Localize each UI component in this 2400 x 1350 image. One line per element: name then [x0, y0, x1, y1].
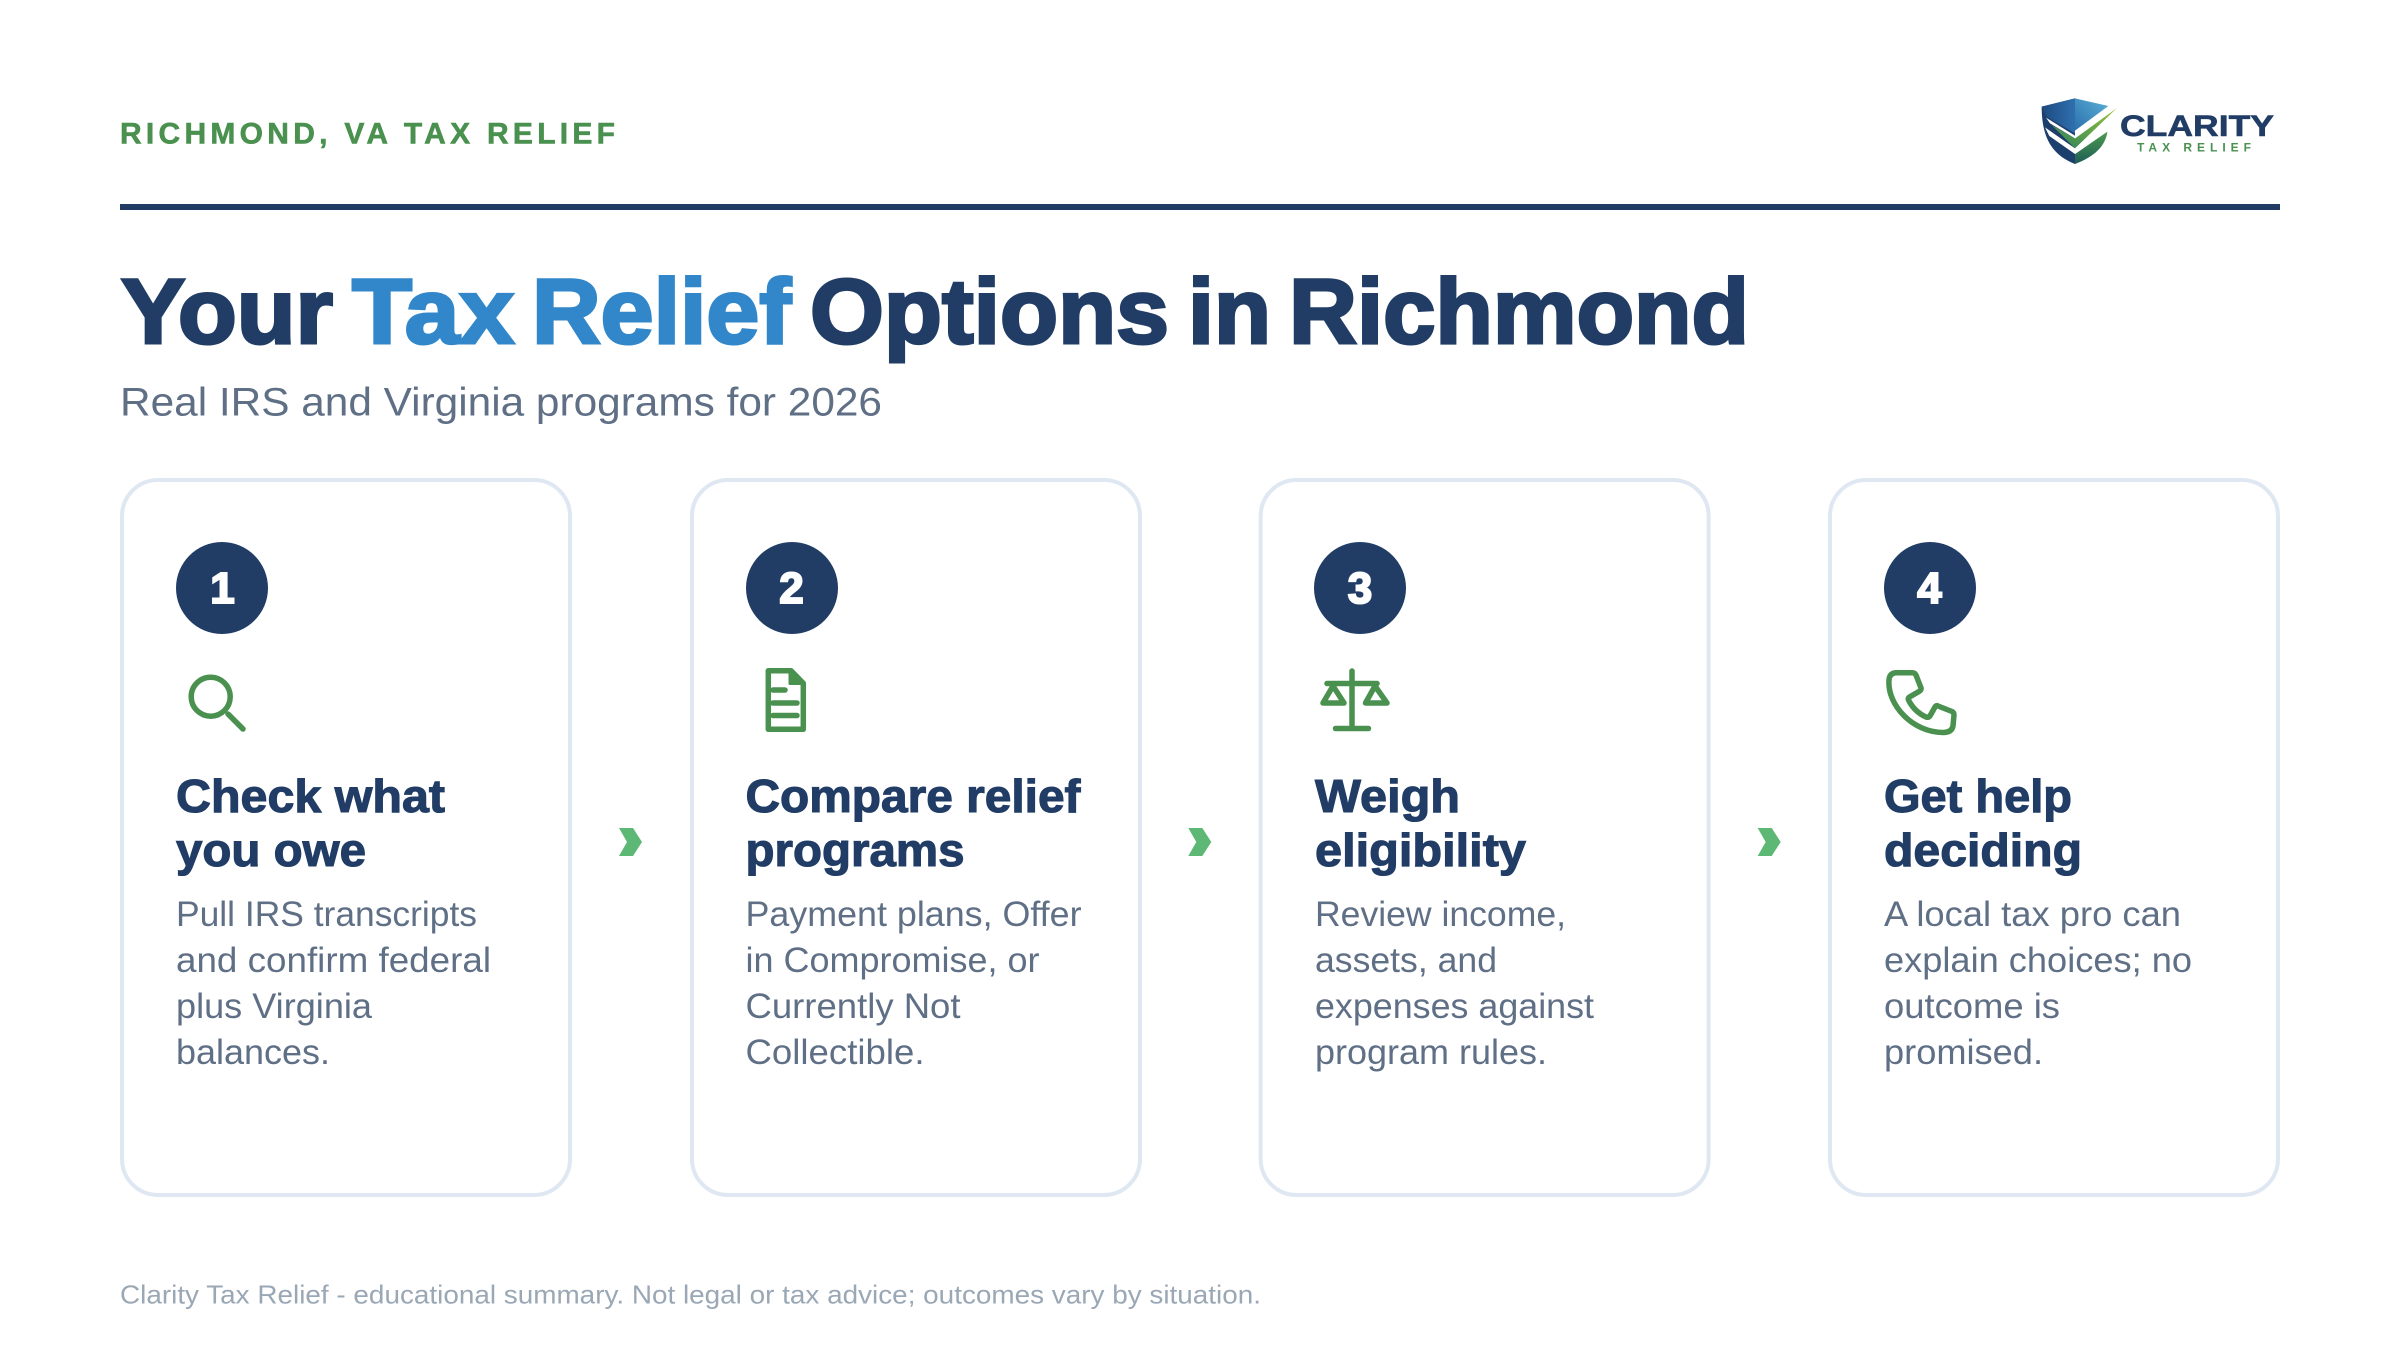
logo: Clarity Tax Relief	[2042, 98, 2274, 164]
panel: step 2	[692, 480, 1140, 1195]
step 1 heading: Check what	[176, 770, 445, 822]
step 2 heading	[746, 770, 1081, 876]
step 3 heading	[1315, 770, 1526, 876]
icon: shield with check	[2042, 98, 2117, 164]
step 3 heading: Weigh	[1315, 770, 1460, 822]
step number 3: 3	[1348, 564, 1372, 613]
step 1 heading	[176, 770, 445, 876]
step number 2	[746, 542, 838, 634]
step 3 heading: eligibility	[1315, 824, 1526, 876]
step 1 description: and confirm federal	[176, 941, 491, 980]
panel: step 4	[1830, 480, 2278, 1195]
step 3 description: assets, and	[1315, 941, 1497, 980]
step 1 heading: you owe	[176, 824, 366, 876]
title	[121, 261, 1749, 363]
step 2 description: Currently Not	[746, 987, 961, 1026]
step 1 description: plus Virginia	[176, 987, 373, 1026]
title: Tax	[352, 261, 514, 363]
step 2 description	[746, 895, 1082, 1072]
step 2 heading: Compare relief	[746, 770, 1081, 822]
step 2 description: Collectible.	[746, 1033, 924, 1072]
step number 4: 4	[1917, 564, 1942, 613]
title: Relief	[532, 261, 791, 363]
icon: balance scale	[1323, 671, 1387, 728]
step 4 description: promised.	[1884, 1033, 2043, 1072]
step 3 description: Review income,	[1315, 895, 1566, 934]
eyebrow heading: RICHMOND, VA TAX RELIEF	[120, 118, 615, 150]
step 4 description	[1884, 895, 2192, 1072]
step 4 heading: deciding	[1884, 824, 2082, 876]
step number 1: 1	[210, 564, 235, 613]
title: Options	[810, 261, 1169, 363]
step 1 description: balances.	[176, 1033, 330, 1072]
arrow 3 to 4	[1758, 828, 1781, 856]
step 3 description	[1315, 895, 1594, 1072]
step number 3	[1314, 542, 1406, 634]
step number 4	[1884, 542, 1976, 634]
panel: step 3	[1261, 480, 1709, 1195]
step 1 description	[176, 895, 491, 1072]
icon: document	[768, 671, 803, 729]
step 4 description: A local tax pro can	[1884, 895, 2181, 934]
arrow 2 to 3	[1188, 828, 1211, 856]
subtitle: Real IRS and Virginia programs for 2026	[120, 380, 882, 424]
step 3 description: expenses against	[1315, 987, 1594, 1026]
step 4 heading: Get help	[1884, 770, 2072, 822]
title: Your	[121, 261, 333, 363]
step 4 description: explain choices; no	[1884, 941, 2192, 980]
step 4 heading	[1884, 770, 2082, 876]
logo tagline: TAX RELIEF	[2137, 140, 2251, 154]
step 2 description: in Compromise, or	[746, 941, 1040, 980]
panel: step 1	[122, 480, 570, 1195]
title: in	[1188, 261, 1271, 363]
arrow 1 to 2	[619, 828, 642, 856]
step 2 description: Payment plans, Offer	[746, 895, 1082, 934]
logo wordmark: CLARITY	[2120, 110, 2274, 143]
step number 2: 2	[779, 564, 804, 613]
step number 1	[176, 542, 268, 634]
step 2 heading: programs	[746, 824, 964, 876]
footer disclaimer: Clarity Tax Relief - educational summary. Not legal or tax advice; outcomes vary by situation.	[120, 1280, 1261, 1310]
icon: phone	[1889, 673, 1954, 733]
step 1 description: Pull IRS transcripts	[176, 895, 477, 934]
icon: magnifying glass	[191, 677, 243, 729]
title: Richmond	[1289, 261, 1749, 363]
step 4 description: outcome is	[1884, 987, 2060, 1026]
step 3 description: program rules.	[1315, 1033, 1547, 1072]
